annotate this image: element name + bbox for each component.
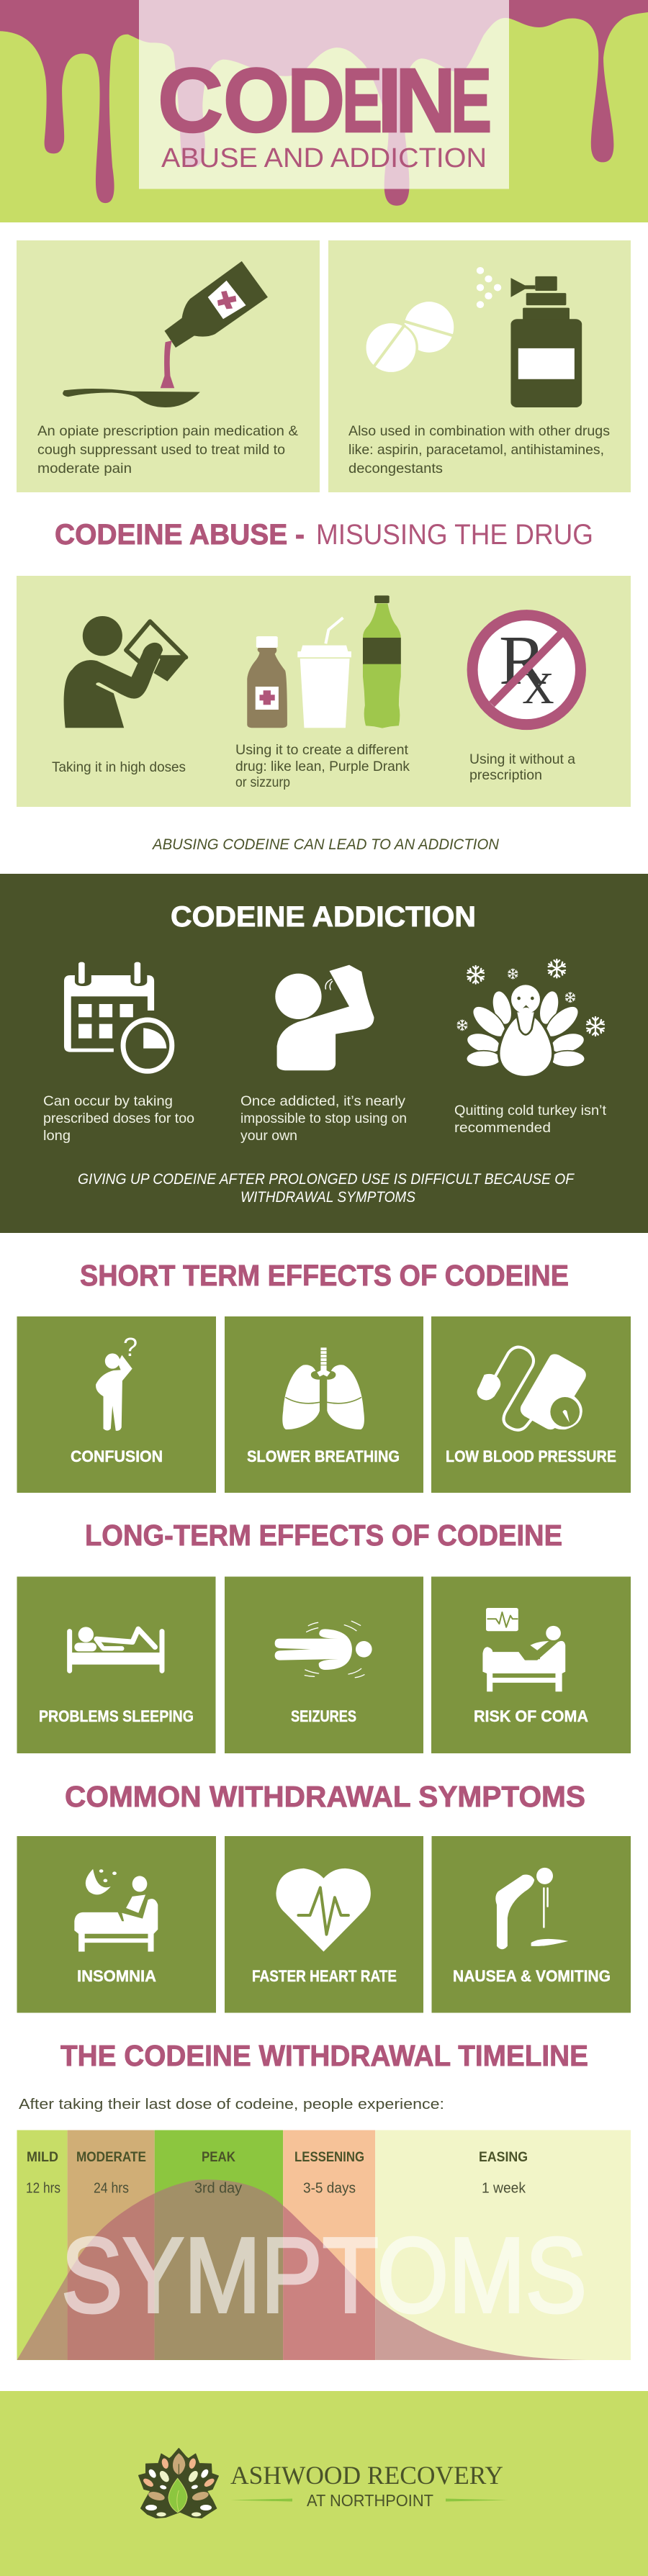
stage durations: 12 hrs — [26, 2181, 60, 2197]
panel: confusion — [17, 1316, 216, 1493]
panel: low blood pressure — [431, 1316, 631, 1493]
icon: confused person: ? — [123, 1332, 138, 1362]
timeline bands — [17, 2130, 631, 2360]
addiction facts: Once addicted, it’s nearly — [240, 1093, 405, 1109]
stage labels: PEAK — [202, 2149, 235, 2165]
icon: person in bed — [70, 1627, 162, 1671]
method labels: Using it to create a different — [235, 742, 409, 758]
stage durations: 3-5 days — [303, 2181, 356, 2197]
description text: decongestants — [348, 461, 443, 476]
dripping syrup — [0, 0, 648, 206]
heading: withdrawal timeline: THE CODEINE WITHDRAWAL TIMELINE — [60, 2039, 588, 2072]
title: O — [223, 50, 289, 151]
icon: cold turkey — [457, 959, 604, 1077]
icon: pills and spray bottle — [365, 267, 582, 407]
title: C — [158, 50, 223, 151]
panel: risk of coma — [431, 1576, 631, 1753]
description text — [348, 423, 610, 476]
icon: lungs — [282, 1347, 364, 1429]
icon: syrup bottle and spoon — [63, 261, 268, 407]
label: LOW BLOOD PRESSURE — [446, 1447, 616, 1465]
icon: confused person — [96, 1332, 138, 1431]
icon: cough syrup, cup and soda bottle — [247, 595, 401, 728]
heading: short term effects: SHORT TERM EFFECTS OF CODEINE — [80, 1259, 569, 1292]
symptom curve — [17, 2179, 585, 2360]
heading: CODEINE ADDICTION — [171, 901, 476, 933]
panel: nausea and vomiting — [432, 1836, 631, 2012]
brand name: ASHWOOD RECOVERY — [230, 2461, 503, 2490]
addiction facts: prescribed doses for too — [43, 1111, 194, 1126]
addiction facts: Quitting cold turkey isn’t — [454, 1103, 607, 1118]
title: I — [377, 50, 402, 151]
footer — [0, 2391, 648, 2576]
addiction facts: impossible to stop using on — [240, 1111, 407, 1126]
title: E — [342, 50, 382, 151]
addiction facts: recommended — [454, 1120, 551, 1136]
stage labels: MILD — [27, 2149, 58, 2165]
description text: Also used in combination with other drugs — [348, 423, 610, 439]
label: SEIZURES — [291, 1707, 356, 1725]
stage durations: 24 hrs — [94, 2181, 129, 2197]
icon: hospital bed and monitor — [482, 1608, 565, 1691]
label: RISK OF COMA — [474, 1707, 588, 1725]
brand location: AT NORTHPOINT — [307, 2491, 433, 2510]
title: E — [451, 50, 492, 151]
label: NAUSEA & VOMITING — [453, 1967, 611, 1985]
icon: awake in bed under moon — [74, 1869, 158, 1952]
title — [158, 50, 492, 151]
description text: An opiate prescription pain medication & — [37, 423, 298, 439]
panel: problems sleeping — [17, 1576, 216, 1753]
addiction facts — [43, 1093, 607, 1144]
snowflakes — [457, 959, 604, 1036]
label: INSOMNIA — [77, 1967, 156, 1985]
label: CONFUSION — [71, 1447, 163, 1465]
callout: withdrawal difficulty: GIVING UP CODEINE AFTER PROLONGED USE IS DIFFICULT BECAUSE OF — [78, 1171, 575, 1188]
title: N — [395, 50, 456, 151]
stage durations: 3rd day — [194, 2181, 242, 2197]
description text — [37, 423, 298, 476]
stage labels: EASING — [479, 2149, 528, 2165]
label: PROBLEMS SLEEPING — [39, 1707, 194, 1725]
method labels: drug: like lean, Purple Drank — [235, 759, 410, 774]
panel: opiate description — [17, 240, 320, 492]
translucent title backing — [139, 0, 509, 189]
addiction facts: your own — [240, 1128, 297, 1144]
icon: no prescription sign: X — [522, 664, 554, 713]
icon: calendar and clock — [64, 962, 180, 1075]
stage durations — [26, 2181, 526, 2197]
label: SLOWER BREATHING — [247, 1447, 400, 1465]
heading: withdrawal symptoms: COMMON WITHDRAWAL SYMPTOMS — [65, 1780, 585, 1813]
heading: codeine abuse: CODEINE ABUSE - — [55, 519, 305, 551]
icon: no prescription sign — [472, 615, 580, 725]
method labels: or sizzurp — [235, 774, 290, 790]
addiction facts: Can occur by taking — [43, 1093, 173, 1109]
addiction facts: long — [43, 1128, 71, 1144]
icon: heart with pulse — [276, 1868, 371, 1952]
panel: faster heart rate — [225, 1836, 423, 2012]
heading: codeine abuse: MISUSING THE DRUG — [316, 519, 593, 551]
subtitle: ABUSE AND ADDICTION — [161, 143, 487, 173]
icon: person vomiting — [495, 1868, 568, 1949]
panel: codeine addiction — [0, 874, 648, 1233]
callout: withdrawal difficulty: WITHDRAWAL SYMPTOMS — [240, 1189, 415, 1206]
icon: no prescription sign: R — [499, 622, 546, 700]
panel: insomnia — [17, 1836, 216, 2012]
chart: withdrawal timeline — [17, 2130, 631, 2360]
icon: person drinking from carton — [64, 616, 188, 728]
heading: long-term effects: LONG-TERM EFFECTS OF CODEINE — [85, 1519, 562, 1552]
panel: slower breathing — [225, 1316, 423, 1493]
stage labels: LESSENING — [294, 2149, 364, 2165]
panel: seizures — [225, 1576, 423, 1753]
panel: misuse methods — [17, 576, 631, 807]
stage durations: 1 week — [482, 2181, 526, 2197]
panel: hero header — [0, 0, 648, 222]
description text: moderate pain — [37, 461, 132, 476]
icon: blood pressure cuff — [477, 1347, 586, 1430]
heading: codeine abuse — [55, 519, 593, 551]
method labels: prescription — [469, 767, 542, 783]
callout: abuse leads to addiction: ABUSING CODEINE CAN LEAD TO AN ADDICTION — [151, 836, 500, 853]
icon: shaking figure — [275, 1621, 372, 1678]
stage labels — [27, 2149, 528, 2165]
description text: cough suppressant used to treat mild to — [37, 442, 285, 458]
label: FASTER HEART RATE — [252, 1967, 397, 1985]
title: D — [287, 50, 345, 151]
icon: person drinking — [275, 965, 374, 1070]
callout: withdrawal difficulty — [78, 1171, 575, 1206]
method labels — [52, 742, 575, 790]
stage labels: MODERATE — [76, 2149, 146, 2165]
method labels: Using it without a — [469, 751, 575, 767]
intro text: After taking their last dose of codeine, people experience: — [19, 2097, 444, 2112]
panel: combination drugs — [328, 240, 631, 492]
logo: peacock leaves — [139, 2449, 218, 2518]
description text: like: aspirin, paracetamol, antihistamines, — [348, 442, 604, 458]
method labels: Taking it in high doses — [52, 759, 186, 775]
